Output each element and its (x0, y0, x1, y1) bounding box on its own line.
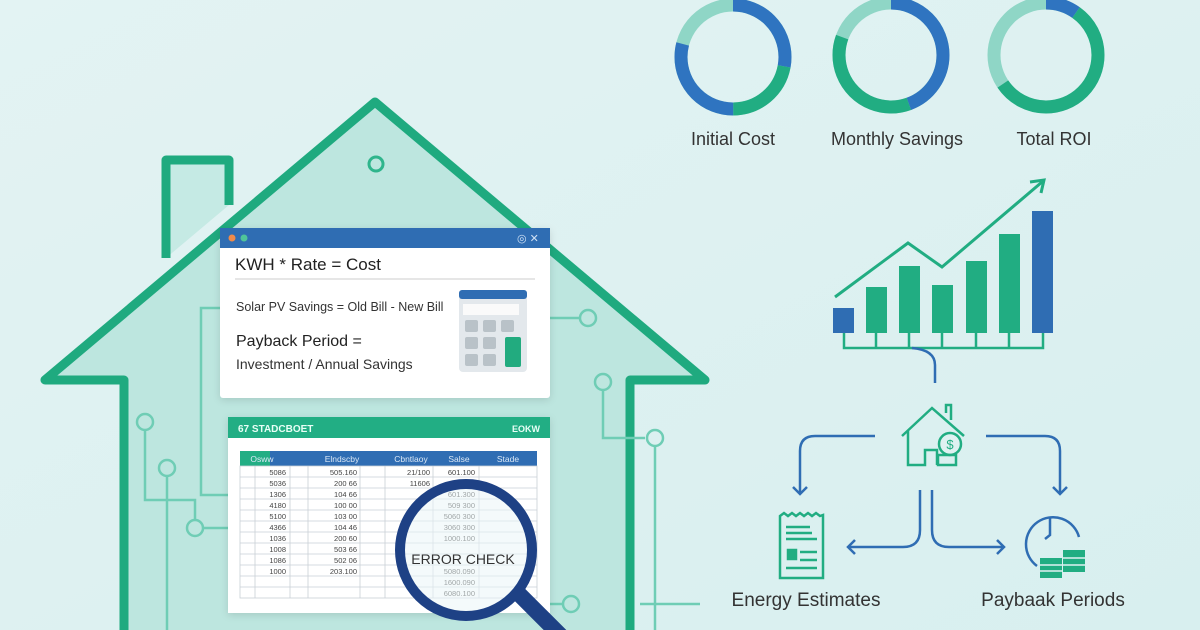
spreadsheet: Osww (250, 454, 274, 464)
spreadsheet: Elndscby (325, 454, 360, 464)
spreadsheet: 1306 (269, 490, 286, 499)
spreadsheet: 104 46 (334, 523, 357, 532)
spreadsheet: Cbntlaoy (394, 454, 429, 464)
formula window: Solar PV Savings = Old Bill - New Bill (236, 300, 443, 314)
donut: monthly savings (831, 3, 963, 149)
spreadsheet: 1000.100 (444, 534, 475, 543)
donut: initial cost (681, 5, 785, 149)
formula window: ◎ ✕ (517, 233, 539, 245)
spreadsheet: 203.100 (330, 567, 357, 576)
icon: house with dollar: $ (946, 437, 954, 452)
magnifier: error check: ERROR CHECK (411, 551, 515, 567)
spreadsheet (228, 417, 550, 613)
spreadsheet: 601.300 (448, 490, 475, 499)
spreadsheet: 1600.090 (444, 578, 475, 587)
spreadsheet: 505.160 (330, 468, 357, 477)
spreadsheet: 200 60 (334, 534, 357, 543)
donut: total roi: Total ROI (1016, 129, 1092, 149)
spreadsheet: 5086 (269, 468, 286, 477)
spreadsheet: 5060 300 (444, 512, 475, 521)
spreadsheet: 5036 (269, 479, 286, 488)
spreadsheet: 11606 (410, 479, 430, 488)
spreadsheet: 21/100 (407, 468, 430, 477)
spreadsheet: 3060 300 (444, 523, 475, 532)
formula window: KWH * Rate = Cost (235, 255, 381, 274)
arrows from house (793, 436, 1067, 554)
spreadsheet: Stade (497, 454, 519, 464)
spreadsheet: 6080.100 (444, 589, 475, 598)
spreadsheet: EOKW (512, 424, 541, 434)
icon: receipt (780, 513, 823, 578)
donut: monthly savings: Monthly Savings (831, 129, 963, 149)
spreadsheet: 601.100 (448, 468, 475, 477)
spreadsheet: 1036 (269, 534, 286, 543)
bar chart with trend arrow (833, 180, 1053, 383)
spreadsheet: 4180 (269, 501, 286, 510)
spreadsheet: 100 00 (334, 501, 357, 510)
spreadsheet: 502 06 (334, 556, 357, 565)
formula window (220, 228, 550, 398)
formula window: Investment / Annual Savings (236, 356, 413, 372)
spreadsheet: 104 66 (334, 490, 357, 499)
donut: total roi (994, 3, 1098, 149)
spreadsheet: 200 66 (334, 479, 357, 488)
spreadsheet: 103 00 (334, 512, 357, 521)
formula window: Payback Period = (236, 333, 362, 350)
house outline (45, 102, 705, 630)
spreadsheet: 67 STADCBOET (238, 424, 313, 435)
label: payback periods: Paybaak Periods (981, 590, 1125, 611)
spreadsheet: 1086 (269, 556, 286, 565)
spreadsheet: 503 66 (334, 545, 357, 554)
donut: initial cost: Initial Cost (691, 129, 775, 149)
spreadsheet: Salse (448, 454, 470, 464)
spreadsheet: 4366 (269, 523, 286, 532)
spreadsheet: 5080.090 (444, 567, 475, 576)
magnifier: error check (400, 484, 565, 630)
spreadsheet: 509 300 (448, 501, 475, 510)
spreadsheet: 1008 (269, 545, 286, 554)
label: energy estimates: Energy Estimates (732, 590, 880, 611)
spreadsheet: 5100 (269, 512, 286, 521)
icon: clock with money (1026, 517, 1085, 578)
icon: house with dollar (902, 405, 964, 465)
spreadsheet: 1000 (269, 567, 286, 576)
icon: calculator (459, 290, 527, 372)
